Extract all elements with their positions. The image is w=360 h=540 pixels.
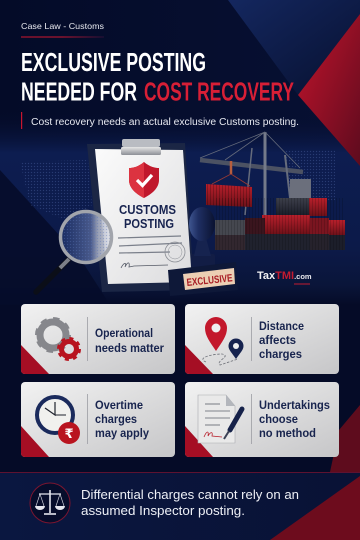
document lines (118, 236, 182, 253)
stamp (168, 207, 238, 296)
title (21, 47, 294, 106)
card text: Distance (259, 321, 304, 333)
clipboard (87, 139, 194, 292)
icon: clock with rupee (37, 397, 80, 444)
icon: map pins (203, 317, 244, 365)
text: Customs Posting (119, 202, 176, 231)
container stacks (215, 179, 345, 250)
icon: gears (37, 319, 80, 360)
logo: TaxTMI.com: TaxTMI.com (257, 270, 312, 282)
magnifying glass (36, 212, 112, 292)
hanging red container (206, 184, 252, 207)
banner text (81, 487, 299, 518)
card: distance (185, 304, 339, 374)
card text: charges (95, 414, 137, 426)
card: undertakings (185, 382, 339, 457)
text: Customs Posting: POSTING (124, 216, 174, 231)
icon: shield with check (129, 162, 159, 198)
stamp base: EXCLUSIVE (186, 272, 233, 289)
seal (165, 242, 185, 262)
icon: document and pen (198, 395, 242, 443)
icon: scales (30, 483, 70, 523)
card text: Overtime (95, 400, 143, 412)
bottom banner (0, 472, 360, 540)
title: NEEDED FOR (21, 76, 137, 106)
signature (121, 263, 168, 268)
card text (95, 328, 164, 355)
card text: needs matter (95, 343, 164, 355)
banner text: assumed Inspector posting. (81, 503, 245, 518)
title: EXCLUSIVE POSTING (21, 47, 206, 77)
text: Customs Posting: CUSTOMS (119, 202, 176, 217)
card text: no method (259, 428, 316, 440)
card text: may apply (95, 428, 150, 440)
card text (95, 400, 150, 440)
card text (259, 321, 304, 361)
card text: Operational (95, 328, 153, 340)
card text: choose (259, 414, 298, 426)
subtitle: Cost recovery needs an actual exclusive Customs posting. (31, 117, 299, 128)
banner text: Differential charges cannot rely on an (81, 487, 299, 502)
clip (121, 139, 161, 155)
port scene: crane and containers (200, 132, 345, 250)
card: operational needs (21, 304, 175, 374)
icon: clock with rupee: ₹ (64, 427, 74, 442)
card text: charges (259, 349, 302, 361)
eyebrow: Case Law - Customs: Case Law - Customs (21, 21, 104, 31)
card text (259, 400, 330, 440)
crane (200, 132, 303, 215)
eyebrow: Case Law - Customs (21, 21, 104, 38)
card text: Undertakings (259, 400, 330, 412)
card: overtime (21, 382, 175, 457)
card text: affects (259, 335, 296, 347)
stamp handle (189, 207, 215, 267)
